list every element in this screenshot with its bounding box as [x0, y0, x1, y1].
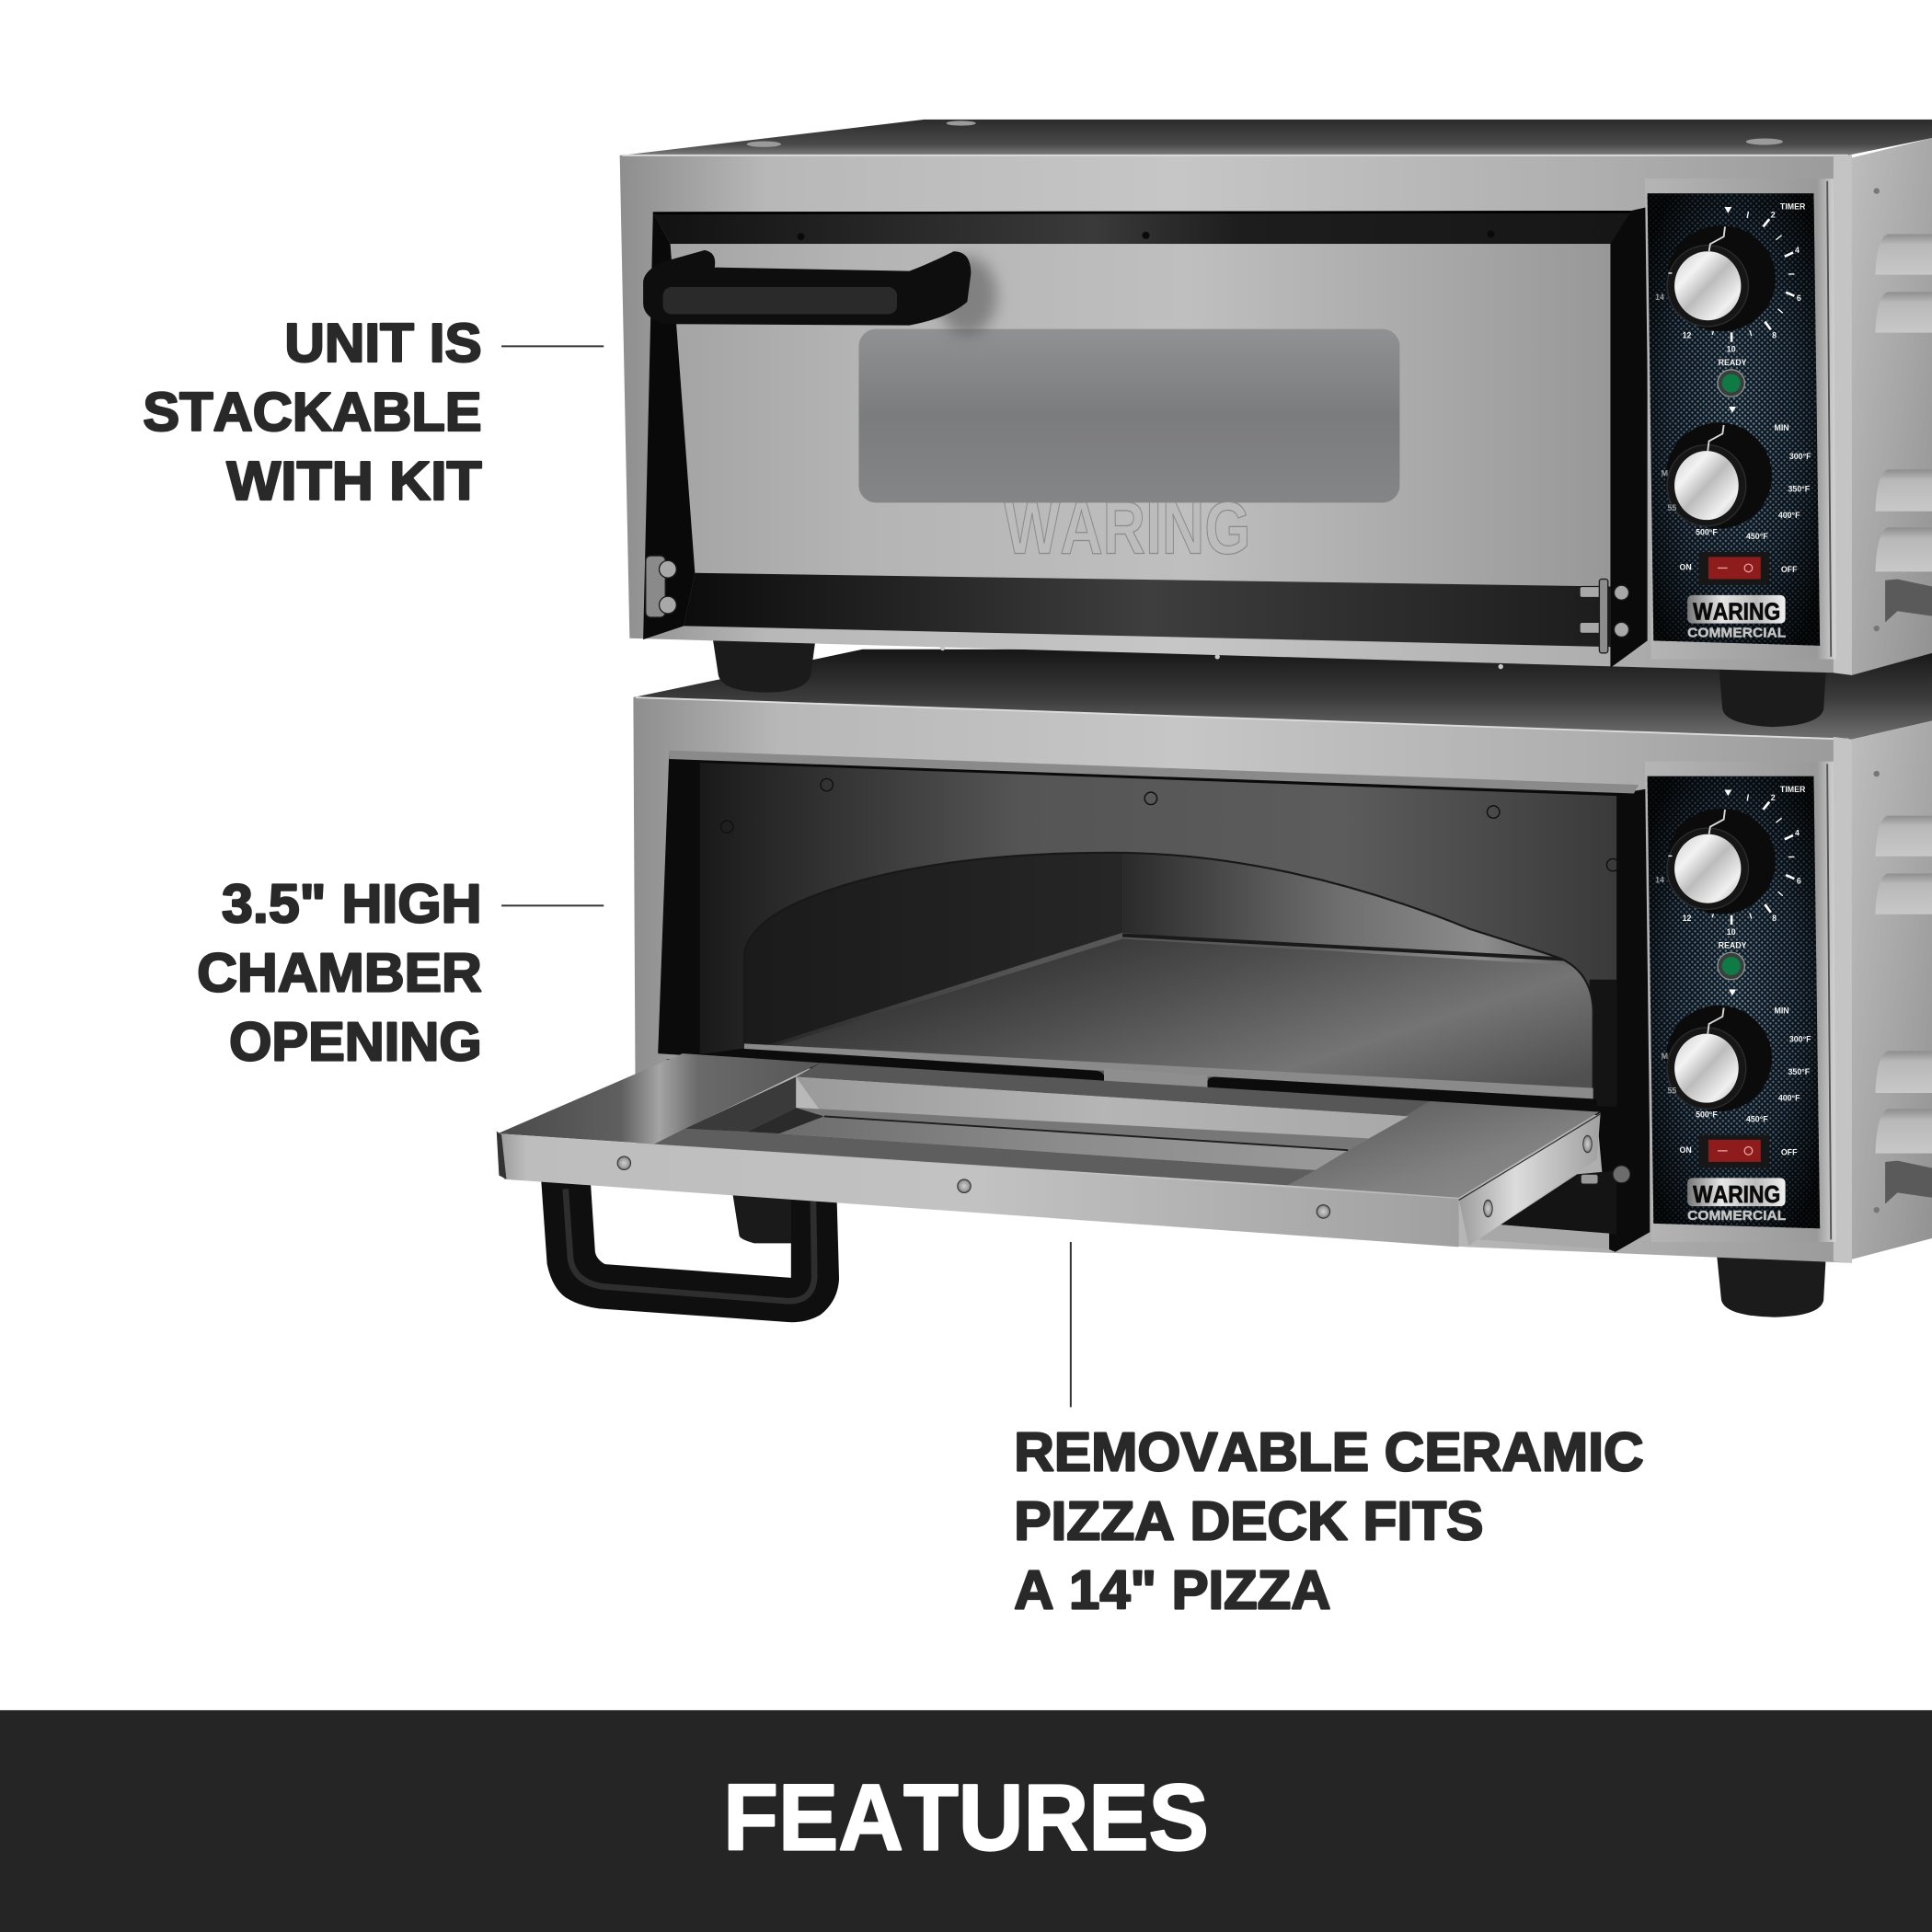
arch left wall [745, 854, 1122, 1045]
temperature labels: 400°F [1778, 1094, 1800, 1103]
temperature labels: 400°F [1778, 511, 1800, 520]
footer title: FEATURES [723, 1765, 1209, 1869]
upper oven feet [712, 635, 1826, 727]
callout: chamber opening [197, 874, 604, 1072]
black strip left [665, 1049, 1105, 1087]
temperature labels: MIN [1775, 1006, 1789, 1016]
callout text: 3.5" HIGH [222, 874, 482, 934]
foot below door [732, 1189, 801, 1243]
steel tab [1104, 1068, 1207, 1089]
callout text: A 14" PIZZA [1014, 1560, 1330, 1620]
timer ticks [1668, 794, 1794, 925]
tray edge line [824, 1116, 1348, 1150]
panel face [1648, 193, 1820, 646]
upper oven side panel [1852, 138, 1932, 675]
door top strip [653, 211, 1631, 244]
handle shape [541, 1177, 839, 1322]
temperature labels: M [1662, 1052, 1668, 1061]
timer labels: 14 [1655, 876, 1664, 885]
temperature labels: 450°F [1746, 532, 1768, 541]
handle highlight [663, 287, 897, 315]
temperature labels: 55 [1667, 503, 1676, 512]
commercial text: COMMERCIAL [1687, 1209, 1786, 1224]
recess bright band [796, 1077, 1409, 1150]
callout text: UNIT IS [284, 314, 482, 374]
timer labels: TIMER [1780, 785, 1806, 794]
lower side bracket [1885, 1161, 1932, 1203]
panel face [1648, 776, 1820, 1228]
timer labels: 8 [1772, 331, 1777, 340]
temperature labels: 300°F [1789, 1034, 1811, 1043]
ready lamp [1718, 952, 1744, 980]
timer labels: 2 [1771, 793, 1776, 802]
callout: pizza deck [1014, 1242, 1644, 1620]
upper top holes [747, 121, 1783, 147]
upper oven front face [620, 155, 1852, 675]
floor front lip [744, 1043, 1593, 1099]
pull-out door [497, 1053, 1630, 1249]
recess left wall [685, 1077, 796, 1132]
temperature knob body [1666, 1006, 1772, 1111]
band lower shade [796, 1108, 1370, 1150]
door right plate [1288, 1101, 1599, 1198]
timer knob cap [1674, 251, 1741, 320]
callout text [197, 874, 482, 1072]
chamber frame [658, 755, 1650, 1252]
timer marker [1724, 207, 1731, 213]
ready label: READY [1719, 941, 1747, 950]
upper oven [620, 120, 1932, 675]
upper oven top surface [622, 120, 1932, 155]
temperature knob cap [1674, 1034, 1739, 1103]
upper corner trim [1834, 155, 1852, 675]
temperature knob cap [1674, 451, 1739, 520]
handle highlight [566, 1189, 814, 1301]
timer labels: 2 [1771, 210, 1776, 219]
door bottom black strip [684, 573, 1610, 647]
temperature marker [1729, 989, 1736, 995]
temperature pointer [1708, 1008, 1724, 1034]
upper side embossing [1875, 234, 1932, 571]
panel dot texture [1648, 776, 1820, 1228]
upper top edge highlight [622, 155, 1848, 156]
door left frame [643, 212, 695, 639]
temperature pointer [1708, 425, 1724, 451]
leader line [1070, 1242, 1072, 1407]
black strip right [1207, 1077, 1597, 1115]
lower corner trim [1834, 737, 1852, 1263]
lower oven front face [633, 697, 1852, 1263]
timer knob body [1667, 225, 1776, 331]
timer labels: TIMER [1780, 202, 1806, 212]
timer labels: 14 [1655, 293, 1664, 302]
upper control panel [1645, 178, 1836, 660]
frame groove [1827, 764, 1831, 1239]
timer labels: 4 [1795, 829, 1800, 838]
lower oven side panel [1852, 720, 1932, 1259]
upper side screws [1874, 188, 1880, 631]
callout text [1014, 1422, 1644, 1620]
right hinge [1580, 579, 1629, 653]
ready label: READY [1719, 358, 1747, 367]
upper side bracket [1885, 579, 1932, 622]
door top left plate [498, 1053, 821, 1144]
temperature labels [1662, 1006, 1811, 1123]
ready lamp [1718, 370, 1744, 397]
timer pointer [1709, 810, 1725, 834]
power switch [1698, 552, 1769, 585]
lower top edge highlight [636, 697, 1848, 740]
lower side screws [1874, 771, 1880, 1213]
temperature labels: 300°F [1789, 452, 1811, 461]
temperature labels: 450°F [1746, 1114, 1768, 1123]
strip bolts [798, 230, 1495, 240]
chamber top lip [669, 751, 1639, 793]
door flange [1459, 1112, 1601, 1246]
door back plate [796, 1063, 1430, 1116]
panel dot texture [1648, 193, 1820, 646]
timer labels [1655, 785, 1806, 937]
lower oven foot, right [1717, 1250, 1826, 1317]
timer labels: 6 [1797, 293, 1801, 303]
temperature labels: M [1662, 469, 1668, 478]
timer labels: 12 [1683, 331, 1691, 340]
arch interior [745, 854, 1593, 1087]
door right frame [1610, 207, 1648, 668]
temperature knob body [1666, 422, 1772, 529]
on off labels [1680, 1145, 1798, 1157]
timer labels [1655, 202, 1806, 353]
strip top edge [653, 212, 1631, 213]
waring badge: WARING [1693, 1182, 1780, 1208]
temperature labels [1662, 423, 1811, 541]
arch outline [744, 853, 1593, 1098]
callout text: REMOVABLE CERAMIC [1014, 1422, 1644, 1482]
temperature labels: 55 [1667, 1087, 1676, 1096]
left hinge [646, 556, 676, 617]
timer knob body [1667, 809, 1776, 914]
door handle [541, 1177, 839, 1322]
power switch [1698, 1134, 1769, 1168]
arch right wall [1122, 854, 1570, 966]
callout text [143, 314, 482, 512]
embossed WARING logo: WARING [1005, 487, 1250, 569]
timer ticks [1668, 212, 1794, 342]
chamber rivets [720, 778, 1619, 871]
temperature labels: MIN [1775, 423, 1789, 432]
timer labels: 4 [1795, 246, 1800, 255]
panel frame [1645, 762, 1836, 1242]
handle shadow [937, 257, 996, 335]
waring badge: WARING [1693, 600, 1780, 626]
temperature labels: 350°F [1788, 1067, 1811, 1076]
oven floor [778, 938, 1593, 1087]
door front edge [498, 1133, 1459, 1247]
area below flange [1501, 1170, 1616, 1235]
door window [858, 329, 1399, 502]
leader line [501, 904, 604, 906]
on off labels: ON [1680, 1145, 1692, 1155]
callout text: WITH KIT [226, 452, 482, 512]
callout text: PIZZA DECK FITS [1014, 1491, 1483, 1551]
door left cap [497, 1131, 506, 1179]
timer labels: 10 [1727, 927, 1736, 937]
door handle [643, 250, 971, 326]
temperature labels: 500°F [1696, 527, 1718, 536]
temperature labels: 500°F [1696, 1110, 1718, 1120]
timer labels: 8 [1772, 914, 1777, 923]
on off labels: OFF [1781, 565, 1798, 574]
temperature labels: 350°F [1788, 484, 1811, 493]
timer knob ring [1667, 828, 1748, 909]
on off labels: ON [1680, 562, 1692, 571]
lower side embossing [1875, 816, 1932, 1154]
temperature knob ring [1667, 1028, 1746, 1109]
timer knob cap [1674, 834, 1741, 903]
timer labels: 12 [1683, 914, 1691, 923]
rivets under upper oven [940, 646, 1503, 669]
footer band [0, 1710, 1932, 1932]
temperature knob ring [1667, 444, 1746, 526]
on off labels [1680, 562, 1798, 574]
lower oven top surface [633, 650, 1932, 740]
door screws [617, 1135, 1592, 1218]
callout: unit is stackable [143, 314, 604, 512]
recess inner wall [747, 1108, 824, 1133]
lower control panel [1645, 762, 1836, 1242]
wall lower right shade [1590, 980, 1616, 1107]
callout text: OPENING [229, 1012, 482, 1072]
commercial text: COMMERCIAL [1687, 626, 1786, 640]
door steel panel [671, 244, 1610, 587]
timer labels: 6 [1797, 876, 1801, 885]
temperature marker [1729, 407, 1736, 413]
panel frame [1645, 178, 1836, 660]
flange edge [1459, 1114, 1601, 1200]
leader line [501, 345, 604, 347]
timer pointer [1709, 226, 1725, 251]
callout text: STACKABLE [143, 383, 482, 443]
recess tray [779, 1116, 1348, 1170]
timer marker [1724, 789, 1731, 796]
hinge, lower oven [1581, 1166, 1630, 1184]
steel lip under door [1478, 1225, 1609, 1249]
recess ramp [654, 1129, 1316, 1185]
chamber back wall [700, 763, 1616, 1103]
timer knob ring [1667, 246, 1748, 327]
lower oven [633, 650, 1932, 1263]
floor back seam [1122, 936, 1577, 960]
frame groove [1827, 181, 1831, 657]
callout text: CHAMBER [197, 943, 482, 1003]
timer labels: 10 [1727, 344, 1736, 353]
on off labels: OFF [1781, 1148, 1798, 1157]
